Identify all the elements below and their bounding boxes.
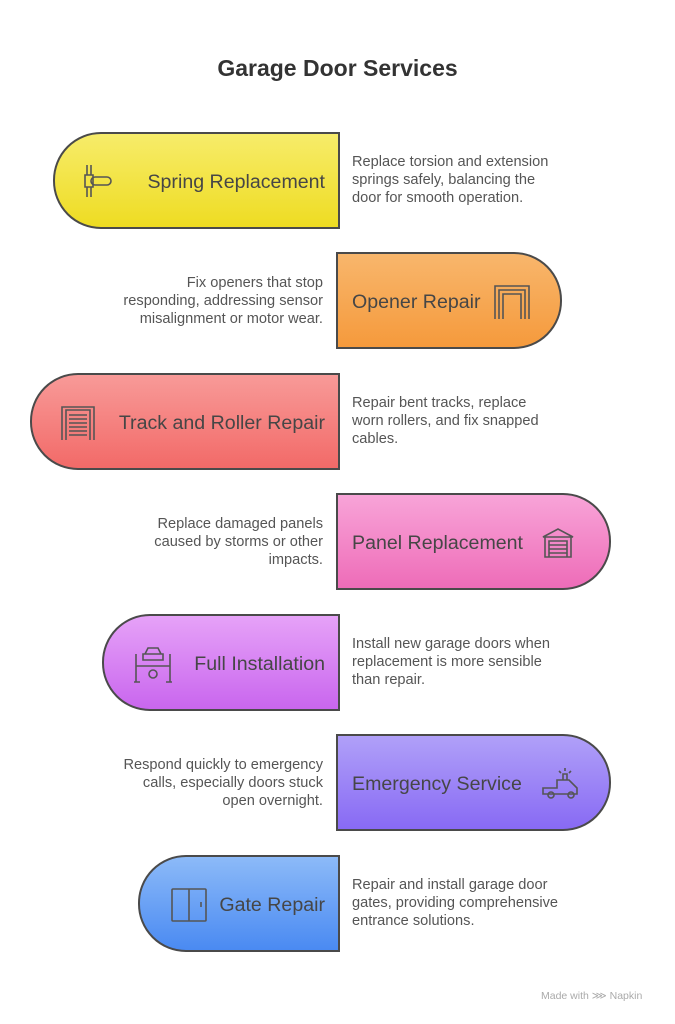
text: panel description: impacts. [269,552,323,568]
icon: spring [84,165,112,197]
text: gate description: gates, providing comprehensive [352,895,558,911]
text: panel description: Replace damaged panels [157,516,323,532]
text: track description: worn rollers, and fix snapped [352,413,539,429]
panel: gate repair [138,855,340,952]
text: spring description [352,154,548,206]
text: emergency description: Respond quickly to emergency [123,757,323,773]
text: opener description [123,275,323,327]
label: Track and Roller Repair [119,412,325,434]
text: track description: Repair bent tracks, replace [352,395,526,411]
label: Opener Repair [352,291,481,313]
label: Gate Repair [219,894,325,916]
title: Garage Door Services [217,55,458,81]
text: installation description: than repair. [352,672,425,688]
label: Full Installation [194,653,325,675]
text: emergency description [123,757,323,809]
text: opener description: Fix openers that stop [187,275,323,291]
icon: roller door [61,406,95,440]
panel: full installation [102,614,340,711]
panel: track and roller [30,373,340,470]
label: Panel Replacement [352,532,523,554]
text: emergency description: calls, especially doors stuck [143,775,323,791]
panel: panel replacement [336,493,611,590]
text: emergency description: open overnight. [222,793,323,809]
icon: garage [542,528,574,558]
text: gate description: Repair and install garage door [352,877,548,893]
icon: tow truck [542,768,578,799]
text: gate description [352,877,558,929]
text: installation description [352,636,550,688]
text: spring description: door for smooth operation. [352,190,523,206]
text: panel description: caused by storms or other [154,534,323,550]
text: installation description: replacement is more sensible [352,654,542,670]
icon: door frame [494,285,530,319]
text: track description [352,395,539,447]
text: gate description: entrance solutions. [352,913,475,929]
text: spring description: Replace torsion and extension [352,154,548,170]
label: Spring Replacement [147,171,325,193]
footer credit: Made with ⋙ Napkin [541,990,642,1002]
icon: lift [134,647,172,683]
icon: double door [171,888,207,922]
text: opener description: responding, addressing sensor [123,293,323,309]
label: Emergency Service [352,773,522,795]
text: installation description: Install new garage doors when [352,636,550,652]
text: spring description: springs safely, balancing the [352,172,535,188]
text: opener description: misalignment or motor wear. [140,311,323,327]
panel: emergency service [336,734,611,831]
panel: opener repair [336,252,562,349]
panel: spring replacement [53,132,340,229]
text: track description: cables. [352,431,398,447]
text: panel description [154,516,323,568]
